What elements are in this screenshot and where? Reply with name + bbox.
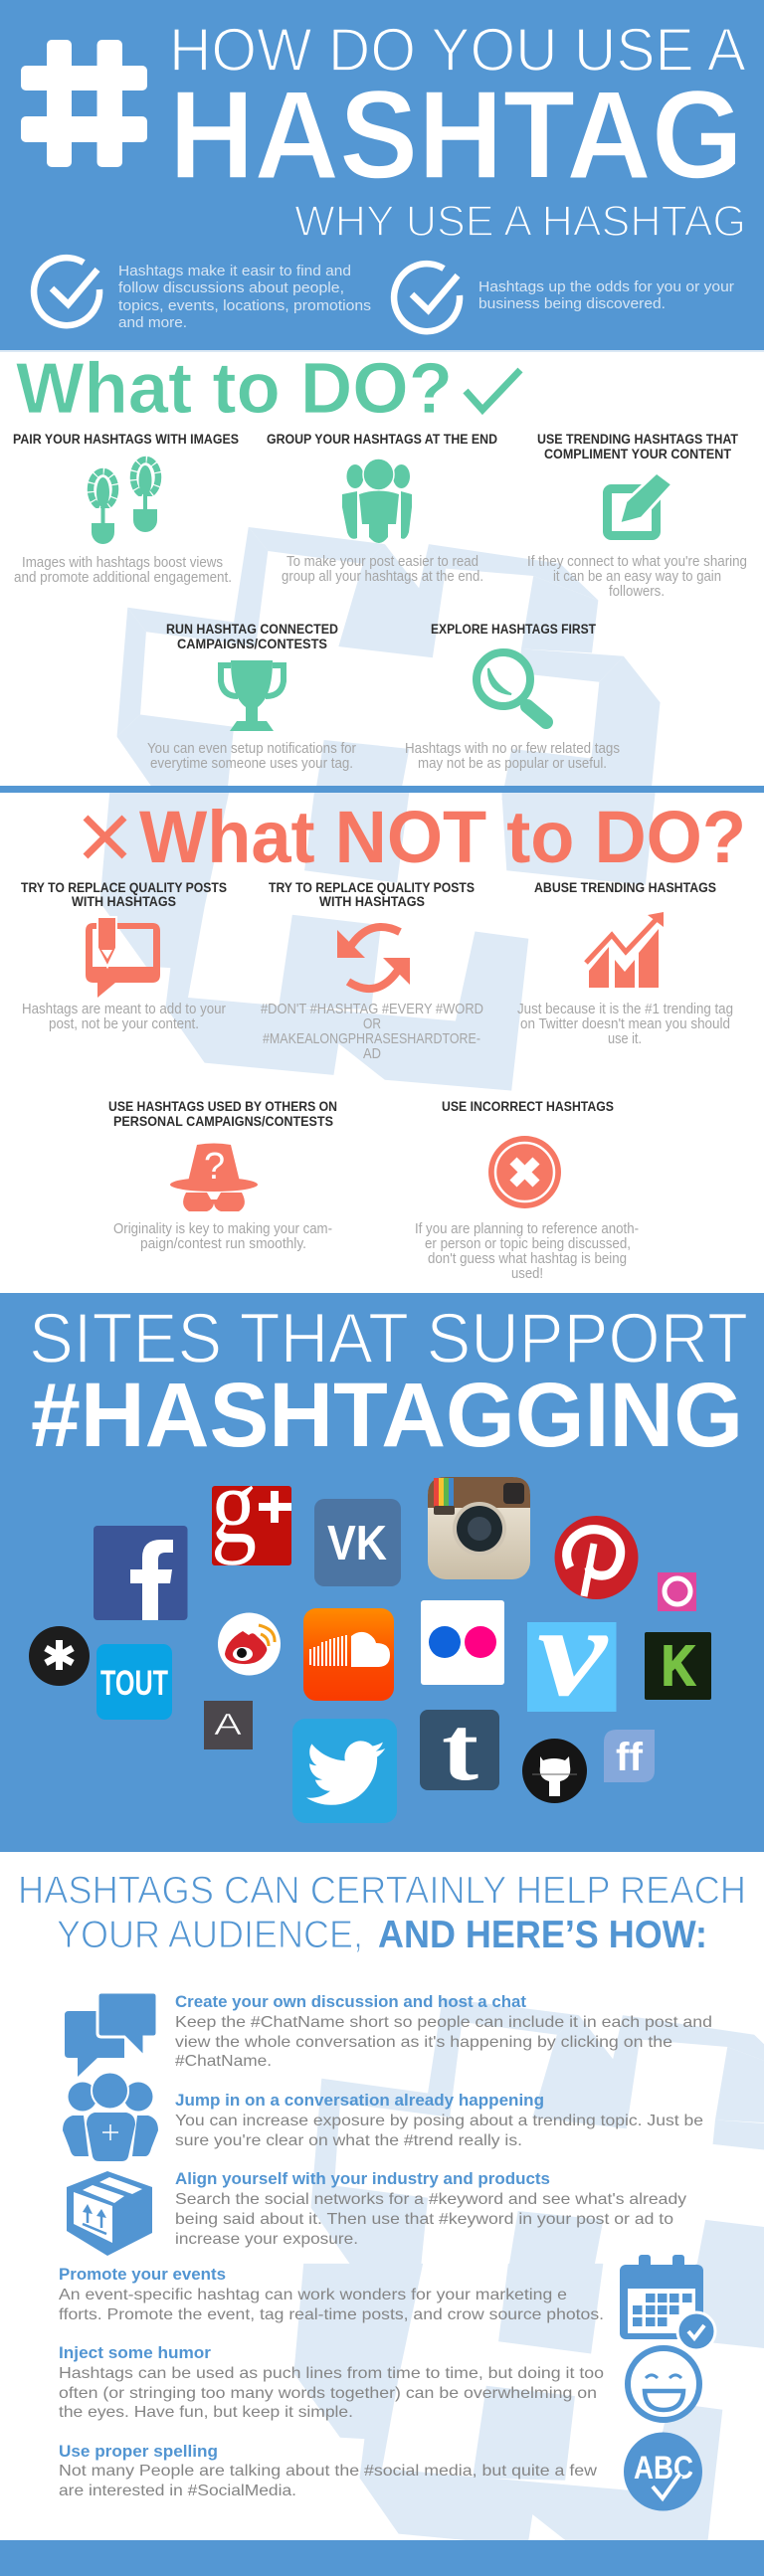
text block: align yourself [175, 2170, 686, 2248]
text block: jump in [175, 2092, 703, 2149]
heading: help reach your audience: YOUR AUDIENCE, [57, 1914, 363, 1956]
icon: magnifying glass [477, 652, 546, 722]
item: abuse trending: on Twitter doesn't mean you should [520, 1016, 730, 1032]
icon: trophy [221, 660, 284, 731]
text block: inject humor: Inject some humor [59, 2344, 212, 2362]
icon: tout: TOUT [100, 1664, 168, 1703]
icon: calendar [620, 2255, 715, 2350]
panel: sites that support hashtagging [0, 1293, 764, 1852]
item: abuse trending: Just because it is the #1 trending tag [517, 1002, 733, 1017]
icon: x in circle [488, 1136, 561, 1208]
icon: refresh arrows [337, 927, 410, 989]
item: replace quality posts one [21, 880, 227, 1032]
footer bar [0, 2540, 764, 2576]
item: incorrect hashtags: If you are planning to reference anoth- [415, 1221, 639, 1237]
icon: pink ring [658, 1572, 696, 1611]
item: replace quality posts one: Hashtags are meant to add to your [22, 1002, 226, 1017]
text block: reason two: Hashtags up the odds for you or your [478, 278, 734, 295]
icon: abc check: ABC [634, 2450, 693, 2485]
text block: promote events: An event-specific hashtag can work wonders for your marketing e [59, 2287, 567, 2303]
icon: smiley [628, 2348, 699, 2420]
text block: reason one: Hashtags make it easir to find and [118, 263, 351, 279]
icon: check circle two [394, 264, 460, 331]
item: run campaigns: RUN HASHTAG CONNECTED [166, 622, 338, 637]
item: incorrect hashtags [415, 1099, 639, 1282]
text block: promote events [59, 2266, 604, 2323]
icon: a square: A [214, 1707, 242, 1742]
icon: chat with pencil [86, 917, 160, 998]
icon: asterisk [29, 1626, 90, 1686]
item: group at the end: To make your post easier to read [286, 554, 478, 570]
icon: flickr [421, 1600, 504, 1685]
item: group at the end [267, 432, 497, 585]
icon: rising chart [586, 912, 664, 988]
panel: what not to do [21, 796, 746, 1282]
icon: group of people [342, 459, 412, 543]
icon: instagram [428, 1477, 530, 1579]
item: abuse trending: ABUSE TRENDING HASHTAGS [534, 880, 716, 895]
panel: how hashtags help [18, 1870, 746, 2510]
item: explore hashtags: EXPLORE HASHTAGS FIRST [431, 622, 597, 637]
item: replace quality posts two: OR [363, 1016, 381, 1032]
text block: jump in: Jump in on a conversation already happening [175, 2092, 544, 2110]
item: replace quality posts one: TRY TO REPLACE QUALITY POSTS [21, 880, 227, 895]
icon: abc check [624, 2433, 702, 2510]
icon: people with plus [63, 2073, 158, 2161]
header panel [0, 0, 764, 352]
icon: kickstarter: K [662, 1634, 695, 1698]
text block: proper spelling: Use proper spelling [59, 2443, 218, 2461]
item: replace quality posts two: #MAKEALONGPHRASESHARDTORE- [263, 1031, 480, 1047]
text block: reason one: topics, events, locations, promotions [118, 297, 371, 314]
heading: help reach your audience: AND HERE’S HOW: [378, 1914, 707, 1956]
item: incorrect hashtags: er person or topic being discussed, [425, 1236, 631, 1252]
text block: reason one [118, 263, 371, 331]
item: run campaigns [147, 622, 356, 772]
icon: heading check [466, 370, 520, 410]
title: how do you use a: HOW DO YOU USE A [169, 16, 746, 84]
icon: google plus: g [211, 1445, 257, 1565]
item: pair with images [13, 432, 239, 586]
item: run campaigns: CAMPAIGNS/CONTESTS [177, 637, 327, 651]
item: replace quality posts one: post, not be your content. [49, 1016, 199, 1032]
text block: inject humor: often (or stringing too many words together) can be overwhelming on [59, 2385, 597, 2402]
item: use trending: If they connect to what you're sharing [527, 554, 747, 570]
heading: what to do: What to DO? [16, 349, 453, 429]
icon: pinterest [555, 1516, 639, 1599]
icon: a square [204, 1701, 253, 1749]
item: pair with images: Images with hashtags boost views [22, 555, 223, 571]
item: pair with images: PAIR YOUR HASHTAGS WITH IMAGES [13, 432, 239, 447]
text block: align yourself: being said about it. Then use that #keyword in your post or ad to [175, 2211, 673, 2228]
icon: check circle one [34, 258, 99, 325]
item: incorrect hashtags: USE INCORRECT HASHTAGS [442, 1099, 614, 1114]
icon: heading x [86, 818, 124, 856]
text block: promote events: Promote your events [59, 2266, 226, 2284]
text block: create discussion: #ChatName. [175, 2053, 272, 2070]
icon: weibo [218, 1613, 281, 1675]
subtitle: why use a hashtag: WHY USE A HASHTAG [294, 197, 746, 246]
item: replace quality posts one: WITH HASHTAGS [72, 894, 176, 909]
text block: create discussion: view the whole conversation as it's happening by clicking on the [175, 2034, 672, 2051]
text block: create discussion: Keep the #ChatName short so people can include it in each post and [175, 2014, 712, 2031]
text block: jump in: sure you're clear on what the #trend really is. [175, 2132, 522, 2149]
icon: soundcloud [303, 1608, 394, 1701]
icon: facebook [94, 1526, 187, 1620]
item: incorrect hashtags: don't guess what hashtag is being [428, 1251, 627, 1267]
icon: tumblr [420, 1698, 499, 1799]
heading: what not to do: What NOT to DO? [139, 796, 746, 878]
text block: align yourself: increase your exposure. [175, 2231, 358, 2248]
icon: google plus [212, 1486, 291, 1565]
text block: align yourself: Align yourself with your industry and products [175, 2170, 550, 2188]
item: use trending [527, 432, 747, 600]
text block: inject humor: the eyes. Have fun, but keep it simple. [59, 2404, 353, 2421]
text block: proper spelling [59, 2443, 597, 2499]
text block: jump in: You can increase exposure by posing about a trending topic. Just be [175, 2113, 703, 2129]
heading: hashtagging: #HASHTAGGING [31, 1365, 743, 1466]
item: explore hashtags [405, 622, 620, 772]
heading: help reach your audience [18, 1870, 746, 1956]
icon: spy hat: ? [204, 1146, 225, 1188]
item: used by others: Originality is key to making your cam- [113, 1221, 332, 1237]
item: use trending: COMPLIMENT YOUR CONTENT [544, 447, 732, 461]
icon: hash symbol [21, 40, 147, 167]
text block: proper spelling: are interested in #SocialMedia. [59, 2483, 296, 2499]
text block: reason one: and more. [118, 314, 187, 331]
text block: inject humor: Hashtags can be used as puch lines from time to time, but doing it too [59, 2365, 604, 2382]
text block: reason two [478, 278, 734, 312]
icon: spy hat [170, 1144, 258, 1211]
panel: what to do [13, 349, 747, 772]
icon: twitter [292, 1719, 397, 1823]
item: use trending: it can be an easy way to gain [553, 569, 721, 585]
item: run campaigns: everytime someone uses your tag. [150, 756, 353, 772]
item: use trending: followers. [609, 584, 665, 600]
item: replace quality posts two: WITH HASHTAGS [319, 894, 425, 909]
item: used by others: PERSONAL CAMPAIGNS/CONTESTS [113, 1114, 333, 1129]
item: pair with images: and promote additional engagement. [14, 570, 232, 586]
item: used by others [108, 1099, 337, 1252]
item: used by others: USE HASHTAGS USED BY OTHERS ON [108, 1099, 337, 1114]
text block: create discussion [175, 1993, 712, 2070]
item: run campaigns: You can even setup notifications for [147, 741, 356, 757]
icon: vimeo [527, 1580, 617, 1724]
icon: vk: VK [327, 1517, 387, 1570]
text block: reason one: follow discussions about people, [118, 279, 344, 296]
item: use trending: USE TRENDING HASHTAGS THAT [537, 432, 739, 447]
icon: chat bubbles [65, 1992, 157, 2077]
icon: tout [96, 1644, 172, 1720]
icon: friendfeed [604, 1730, 655, 1782]
text block: align yourself: Search the social networks for a #keyword and see what's already [175, 2191, 686, 2208]
icon: github [522, 1739, 587, 1803]
icon: package box [67, 2171, 152, 2256]
item: group at the end: group all your hashtags at the end. [282, 569, 483, 585]
item: used by others: paign/contest run smoothly. [140, 1236, 306, 1252]
text block: promote events: fforts. Promote the event, tag real-time posts, and crow source photos. [59, 2306, 604, 2323]
item: replace quality posts two: #DON'T #HASHTAG #EVERY #WORD [261, 1002, 483, 1017]
item: replace quality posts two: TRY TO REPLACE QUALITY POSTS [269, 880, 475, 895]
icon: vk [314, 1499, 401, 1586]
icon: friendfeed: ff [616, 1736, 644, 1779]
icon: footprints [86, 460, 163, 544]
icon: kickstarter [645, 1632, 711, 1700]
item: abuse trending [517, 880, 733, 1047]
item: replace quality posts two: AD [363, 1046, 381, 1062]
icon: note and pencil [607, 472, 672, 535]
title: hashtag: HASHTAG [169, 65, 743, 205]
item: abuse trending: use it. [608, 1031, 642, 1047]
item: explore hashtags: may not be as popular or useful. [418, 756, 607, 772]
text block: reason two: business being discovered. [478, 295, 666, 312]
text block: inject humor [59, 2344, 604, 2421]
text block: proper spelling: Not many People are talking about the #social media, but quite a few [59, 2463, 597, 2480]
text block: create discussion: Create your own discussion and host a chat [175, 1993, 527, 2011]
icon: vimeo: v [537, 1580, 609, 1724]
item: explore hashtags: Hashtags with no or few related tags [405, 741, 620, 757]
item: group at the end: GROUP YOUR HASHTAGS AT THE END [267, 432, 497, 447]
item: incorrect hashtags: used! [511, 1266, 543, 1282]
icon: tumblr: t [442, 1698, 478, 1799]
item: replace quality posts two [261, 880, 483, 1062]
